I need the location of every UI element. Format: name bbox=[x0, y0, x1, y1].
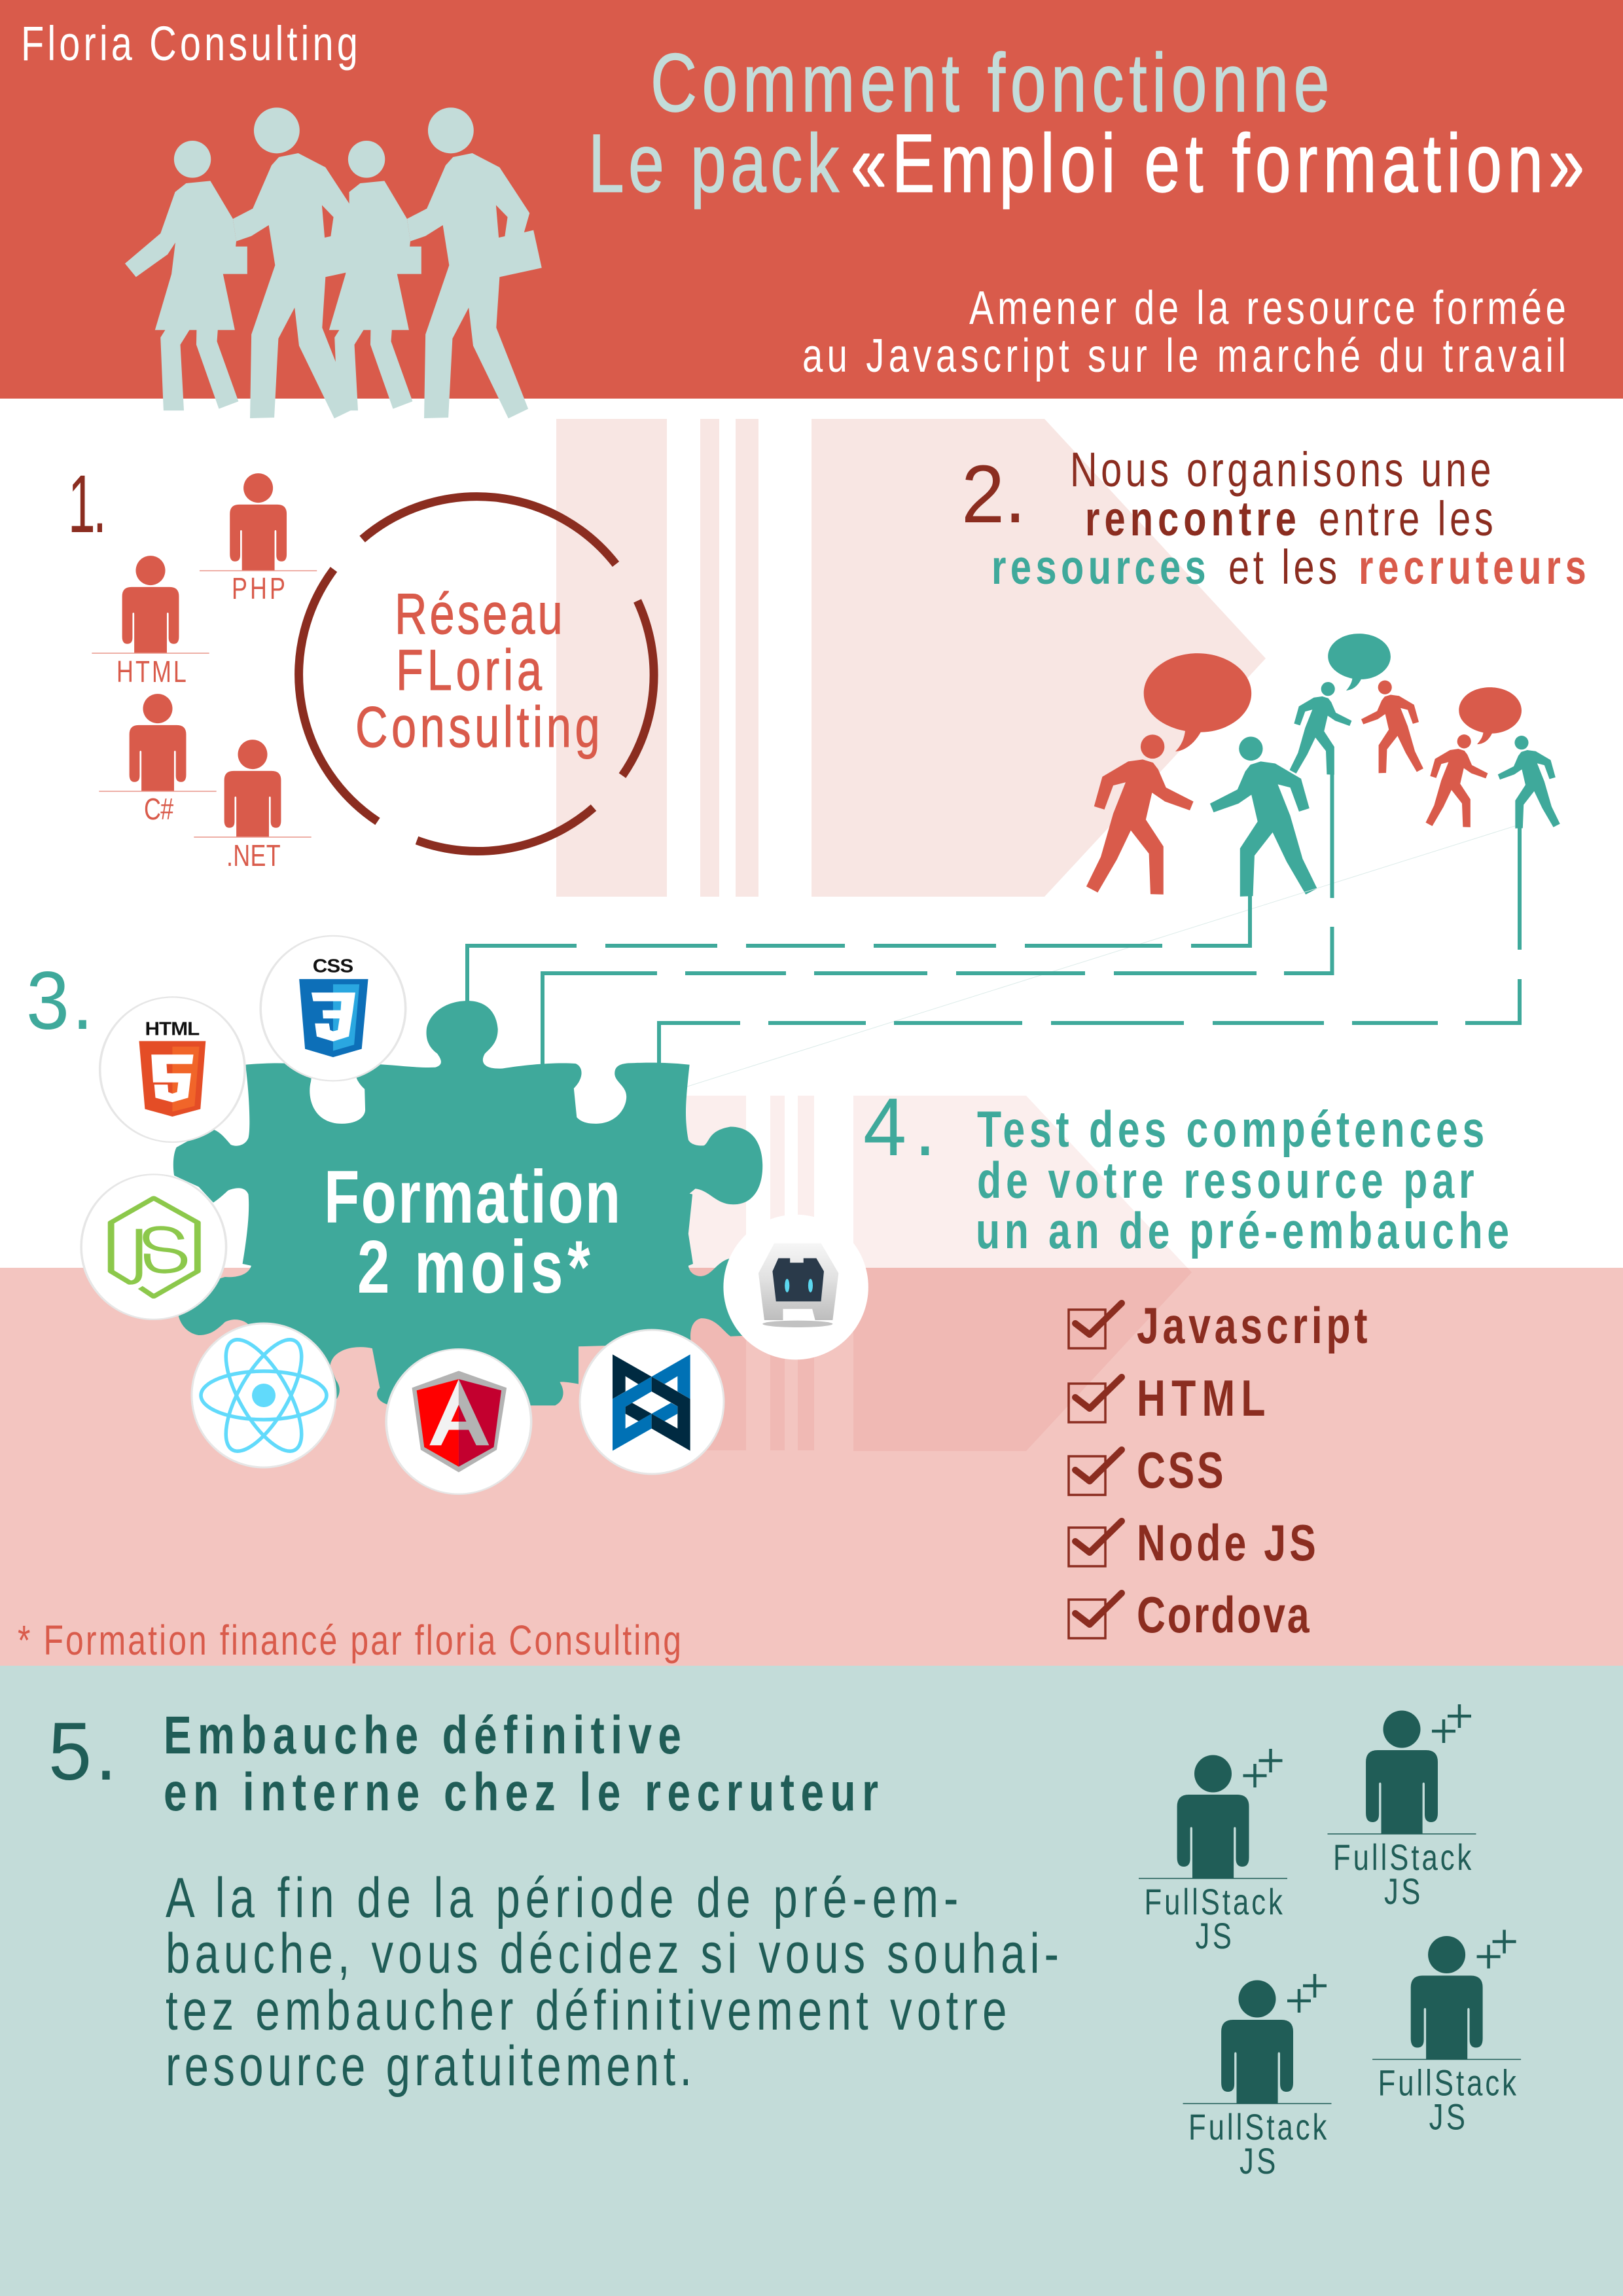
man 1 bbox=[233, 107, 368, 418]
step 4 number: 4. bbox=[863, 1081, 936, 1173]
step 2 text: recruteurs bbox=[1359, 541, 1586, 595]
title: «Emploi et formation» bbox=[851, 117, 1584, 209]
thin diagonal line bbox=[660, 826, 1515, 1095]
icon: FullStack JS person C: FullStack bbox=[1188, 2107, 1327, 2147]
pale arrow behind step 4 bbox=[687, 1096, 1192, 1451]
icon: FullStack JS person D: JS bbox=[1429, 2096, 1465, 2138]
logo circle: HTML5 bbox=[100, 997, 245, 1142]
subtitle: au Javascript sur le marché du travail bbox=[802, 329, 1566, 382]
band: pale teal background bbox=[0, 1666, 1623, 2296]
checkbox: Node JS bbox=[1069, 1521, 1122, 1566]
label: .NET: .NET bbox=[226, 839, 281, 872]
label: PHP: PHP bbox=[232, 572, 285, 605]
logo circle: Backbone bbox=[580, 1330, 724, 1474]
brand name: Floria Consulting bbox=[21, 17, 358, 71]
icon: html person bbox=[92, 556, 209, 654]
step 2 number: 2. bbox=[961, 448, 1026, 540]
label: HTML: HTML bbox=[116, 655, 187, 689]
checkbox: Javascript bbox=[1069, 1303, 1122, 1348]
bubble red small bbox=[1459, 687, 1522, 744]
text: Réseau Floria Consulting bbox=[355, 582, 600, 759]
person small teal 1 bbox=[1290, 682, 1351, 775]
step 1 number: 1. bbox=[68, 458, 107, 550]
broken circle: réseau bbox=[299, 497, 654, 852]
dashed connector 3 bbox=[659, 821, 1520, 1067]
subtitle bbox=[802, 281, 1566, 382]
person small red 2 bbox=[1425, 734, 1488, 827]
icon: FullStack JS person A bbox=[1139, 1749, 1287, 1956]
logo circle: CSS3: CSS bbox=[313, 956, 353, 977]
step 2 text: entre les bbox=[1319, 492, 1493, 547]
illustration: people meeting with speech bubbles bbox=[1086, 634, 1560, 897]
icon: FullStack JS person A: FullStack bbox=[1144, 1882, 1283, 1922]
checkbox: CSS bbox=[1069, 1450, 1122, 1495]
dashed connector 2 bbox=[543, 772, 1332, 1067]
logo circle: CSS3 bbox=[260, 936, 406, 1081]
step 4 text: un an de pré-embauche bbox=[976, 1202, 1509, 1259]
dashed connector 1 bbox=[467, 888, 1250, 1005]
man 2 bbox=[407, 107, 542, 418]
step 5 heading bbox=[164, 1704, 878, 1822]
step 4 text bbox=[976, 1101, 1509, 1259]
item: CSS: CSS bbox=[1137, 1442, 1224, 1499]
step 5 paragraph: bauche, vous décidez si vous souhai- bbox=[166, 1922, 1059, 1985]
checkbox: Cordova bbox=[1069, 1593, 1122, 1638]
bubble teal bbox=[1328, 634, 1391, 691]
logo circle: Cordova bbox=[723, 1215, 868, 1359]
step 5 heading: Embauche définitive bbox=[164, 1704, 681, 1765]
item: Cordova: Cordova bbox=[1137, 1587, 1310, 1643]
step 2 text bbox=[991, 443, 1586, 595]
band: white background bbox=[0, 399, 1623, 1268]
puzzle text: Formation 2 mois: 2 mois* bbox=[357, 1225, 590, 1309]
logo circle: HTML5: HTML bbox=[145, 1019, 200, 1039]
person large red bbox=[1086, 734, 1194, 895]
item: Node JS: Node JS bbox=[1137, 1515, 1316, 1571]
step 5 paragraph: resource gratuitement. bbox=[166, 2035, 692, 2098]
step 5 paragraph: tez embaucher définitivement votre bbox=[166, 1979, 1007, 2042]
icon: FullStack JS person C: JS bbox=[1240, 2141, 1275, 2181]
icon: FullStack JS person C bbox=[1183, 1974, 1331, 2181]
step 5 paragraph bbox=[166, 1867, 1059, 2098]
title: Le pack bbox=[588, 117, 839, 209]
checklist bbox=[1069, 1297, 1368, 1643]
text: Réseau Floria Consulting: Consulting bbox=[355, 695, 600, 759]
step 3 number: 3. bbox=[26, 955, 94, 1047]
step 5 heading: en interne chez le recruteur bbox=[164, 1761, 878, 1822]
step 4 text: Test des compétences bbox=[977, 1101, 1484, 1158]
icon: FullStack JS person B: FullStack bbox=[1333, 1837, 1472, 1878]
step 2 text: et les bbox=[1228, 541, 1337, 595]
icon: FullStack JS person D: FullStack bbox=[1378, 2062, 1517, 2104]
icon: FullStack JS person B: JS bbox=[1384, 1871, 1420, 1912]
icon: FullStack JS person B bbox=[1327, 1704, 1476, 1912]
woman 1 bbox=[125, 141, 247, 410]
title bbox=[588, 37, 1584, 209]
person small red 1 bbox=[1361, 681, 1423, 773]
step 5 paragraph: A la fin de la période de pré-em- bbox=[166, 1867, 958, 1929]
puzzle text: Formation 2 mois bbox=[324, 1155, 620, 1309]
step 5 number: 5. bbox=[48, 1706, 117, 1797]
step 4 text: de votre resource par bbox=[977, 1152, 1474, 1209]
step 2 text: rencontre bbox=[1085, 492, 1296, 547]
band: pink background bbox=[0, 1268, 1623, 1666]
label: C#: C# bbox=[144, 793, 173, 826]
puzzle piece bbox=[173, 1001, 762, 1412]
logo circle: Angular bbox=[386, 1349, 531, 1494]
title: Comment fonctionne bbox=[651, 37, 1329, 129]
checkbox: HTML bbox=[1069, 1377, 1122, 1422]
logo circle: React bbox=[192, 1323, 336, 1467]
text: Réseau Floria Consulting: Réseau bbox=[395, 582, 563, 646]
person small teal 2 bbox=[1498, 736, 1560, 829]
logo circle: Node JS bbox=[81, 1174, 226, 1319]
bubble red large bbox=[1144, 653, 1251, 751]
step 2 text: resources bbox=[991, 541, 1206, 595]
text: Réseau Floria Consulting: FLoria bbox=[396, 638, 542, 702]
person large teal bbox=[1210, 736, 1317, 897]
icon: php person bbox=[200, 473, 317, 571]
icon: FullStack JS person A: JS bbox=[1195, 1916, 1232, 1956]
step 2 text: Nous organisons une bbox=[1070, 443, 1491, 497]
item: HTML: HTML bbox=[1137, 1370, 1266, 1427]
icon: FullStack JS person D bbox=[1372, 1929, 1521, 2138]
icon: .NET person bbox=[194, 740, 312, 838]
item: Javascript: Javascript bbox=[1137, 1297, 1368, 1354]
subtitle: Amener de la resource formée bbox=[969, 281, 1566, 334]
icon: C# person bbox=[99, 694, 217, 792]
icon: group of four walking people bbox=[125, 107, 542, 418]
woman 2 bbox=[329, 141, 421, 410]
footnote: * Formation financé par floria Consulting bbox=[18, 1617, 681, 1664]
pale arrow behind step 1 and 2 bbox=[556, 419, 1266, 897]
puzzle text: Formation 2 mois: Formation bbox=[324, 1155, 620, 1239]
header band bbox=[0, 0, 1623, 399]
